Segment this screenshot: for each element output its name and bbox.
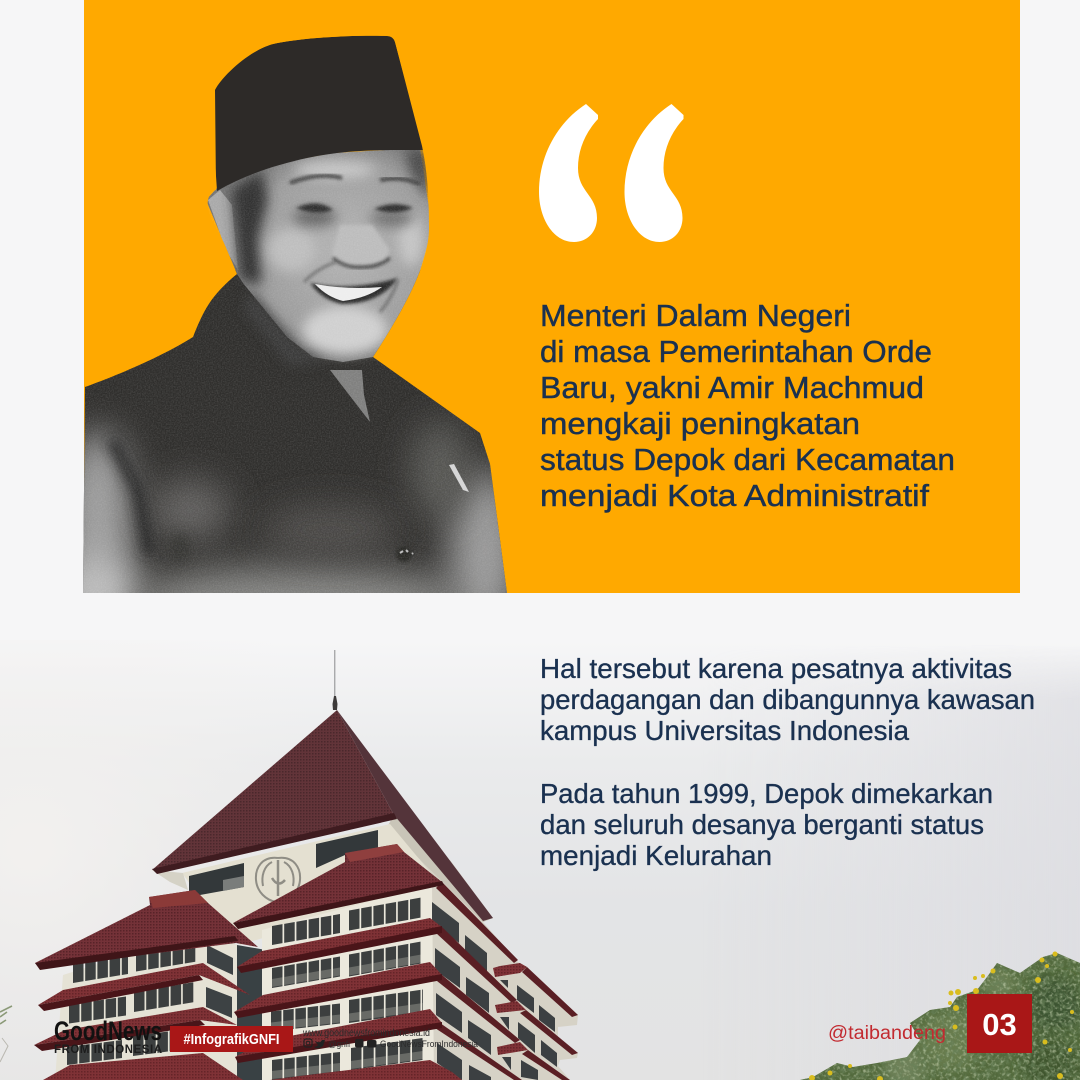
quote text: di masa Pemerintahan Orde bbox=[540, 334, 932, 369]
cream upper wall bbox=[182, 824, 440, 945]
right tower body bbox=[262, 885, 434, 1080]
main roof underside bbox=[387, 815, 493, 922]
website and social handles bbox=[302, 1027, 479, 1050]
left tower windows bbox=[67, 952, 197, 1056]
small rear roofs bbox=[493, 963, 528, 1055]
quote text: menjadi Kota Administratif bbox=[540, 478, 929, 513]
logo: GoodNews From Indonesia: FROM INDONESIA bbox=[54, 1044, 162, 1056]
right tower front windows bbox=[271, 908, 423, 1075]
icon: twitter bbox=[314, 1040, 325, 1048]
orange quote panel bbox=[84, 0, 1020, 593]
page number badge: 03 bbox=[982, 1007, 1017, 1042]
building photo: Universitas Indonesia rectorate bbox=[34, 650, 578, 1080]
tree foliage with yellow flowers bbox=[790, 945, 1080, 1080]
paragraph text: Pada tahun 1999, Depok dimekarkan bbox=[540, 778, 993, 809]
logo: GoodNews From Indonesia: GoodNews bbox=[54, 1016, 162, 1046]
left tower roofs bbox=[34, 890, 258, 1080]
logo: GoodNews From Indonesia bbox=[54, 1016, 162, 1056]
spire bbox=[332, 650, 338, 710]
cheek shadow bbox=[232, 170, 268, 285]
paragraph text bbox=[540, 653, 1035, 871]
right tower side eaves bbox=[435, 882, 578, 1080]
photo grain bbox=[83, 150, 508, 595]
icon: youtube bbox=[367, 1040, 376, 1048]
shirt collar bbox=[330, 370, 370, 422]
sky background photo bbox=[0, 640, 1080, 1080]
quote text: Baru, yakni Amir Machmud bbox=[540, 370, 924, 405]
national emblem relief bbox=[256, 858, 300, 902]
ear bbox=[208, 190, 238, 270]
main roof right slope bbox=[337, 710, 493, 921]
upper wall window left bbox=[189, 863, 244, 897]
main roof eave bbox=[152, 813, 397, 874]
quote text: status Depok dari Kecamatan bbox=[540, 442, 955, 477]
small twig at left edge bbox=[0, 1006, 12, 1062]
quote text bbox=[540, 298, 955, 513]
upper wall window right bbox=[316, 830, 378, 868]
quotation marks bbox=[539, 104, 684, 242]
upper wall window grille left bbox=[223, 876, 244, 891]
icon: facebook bbox=[355, 1039, 364, 1048]
hashtag badge: #InfografikGNFI bbox=[184, 1032, 280, 1048]
right tower roofs bbox=[233, 844, 462, 1080]
main roof front face bbox=[152, 710, 394, 870]
jacket bbox=[83, 270, 507, 593]
gap between towers bbox=[237, 945, 266, 1080]
quote text: Menteri Dalam Negeri bbox=[540, 298, 851, 333]
paragraph text: dan seluruh desanya berganti status bbox=[540, 809, 984, 840]
website and social handles: @gnfi bbox=[328, 1039, 350, 1050]
soffit bbox=[152, 870, 188, 890]
page number badge bbox=[967, 994, 1032, 1053]
paragraph text: perdagangan dan dibangunnya kawasan bbox=[540, 684, 1035, 715]
side face of right tower bbox=[420, 860, 578, 1080]
peci hat bbox=[210, 36, 424, 191]
quote text: mengkaji peningkatan bbox=[540, 406, 860, 441]
paragraph text: Hal tersebut karena pesatnya aktivitas bbox=[540, 653, 1012, 684]
portrait: Amir Machmud bbox=[83, 36, 507, 593]
left tower body bbox=[55, 930, 237, 1080]
paragraph text: menjadi Kelurahan bbox=[540, 840, 772, 871]
right tower side windows bbox=[432, 902, 557, 1080]
icon: instagram bbox=[304, 1039, 312, 1047]
left tower side windows bbox=[206, 945, 233, 1018]
paragraph text: kampus Universitas Indonesia bbox=[540, 715, 909, 746]
website and social handles: www.goodnewsfromindonesia.id bbox=[302, 1027, 430, 1039]
face bbox=[206, 148, 432, 365]
author handle: @taibandeng bbox=[828, 1023, 946, 1044]
hashtag badge bbox=[170, 1026, 293, 1052]
website and social handles: GoodNewsFromIndonesia bbox=[380, 1039, 479, 1050]
